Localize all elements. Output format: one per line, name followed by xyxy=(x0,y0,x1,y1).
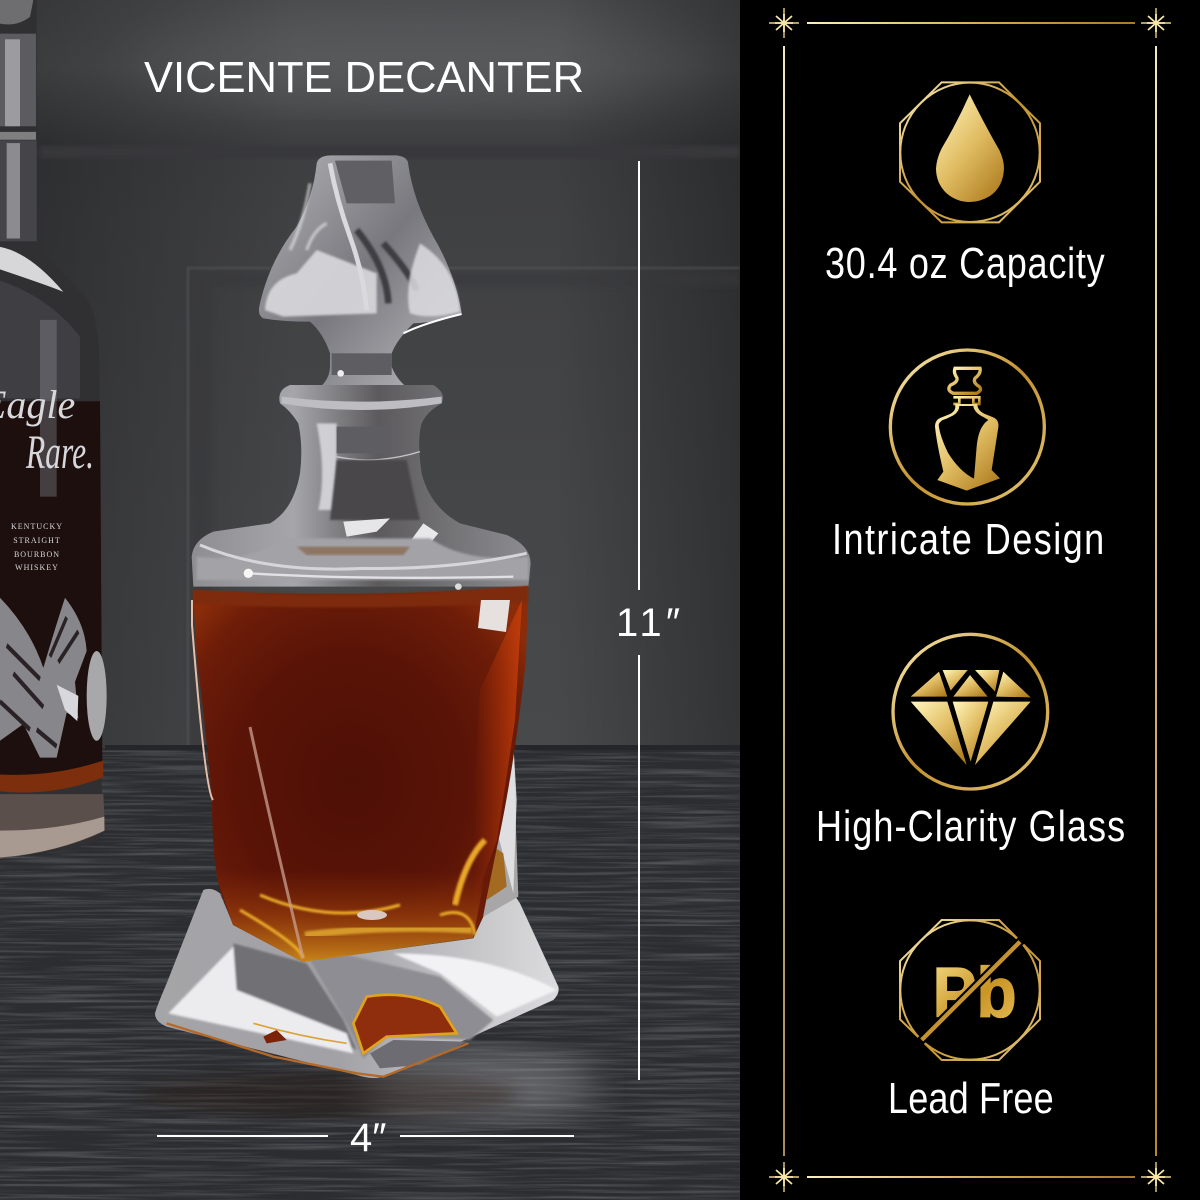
bottle label text xyxy=(0,382,94,572)
title: VICENTE DECANTER xyxy=(144,53,584,102)
icon: lead free xyxy=(900,920,1040,1060)
left whiskey bottle xyxy=(0,0,107,859)
icon: decanter in circle xyxy=(890,350,1044,504)
icon: diamond in circle xyxy=(893,634,1048,789)
decanter xyxy=(155,155,559,1078)
label: glass: High-Clarity Glass xyxy=(816,802,1125,851)
label: design: Intricate Design xyxy=(832,515,1104,564)
bottle label text: Rare. xyxy=(25,426,94,479)
whiskey in decanter xyxy=(192,586,528,962)
ornamental gold frame xyxy=(769,8,1171,1192)
label: lead free: Lead Free xyxy=(888,1074,1054,1123)
decanter base glass xyxy=(155,730,559,1078)
bottle label text: KENTUCKY xyxy=(11,522,63,531)
height dimension: 11 inches: 11″ xyxy=(616,601,680,645)
bottle label text: WHISKEY xyxy=(15,563,59,572)
label: capacity: 30.4 oz Capacity xyxy=(825,239,1105,288)
width dimension: 4 inches: 4″ xyxy=(350,1116,386,1160)
bottle label text: BOURBON xyxy=(14,550,60,559)
decanter neck and shoulder xyxy=(192,385,531,590)
panel: features xyxy=(740,0,1200,1200)
icon: lead free: Pb xyxy=(933,953,1017,1032)
bottle label text: STRAIGHT xyxy=(13,536,61,545)
icon: drop in octagon xyxy=(900,82,1040,222)
photo background: wall and table xyxy=(0,0,740,1200)
decanter stopper xyxy=(259,155,462,390)
